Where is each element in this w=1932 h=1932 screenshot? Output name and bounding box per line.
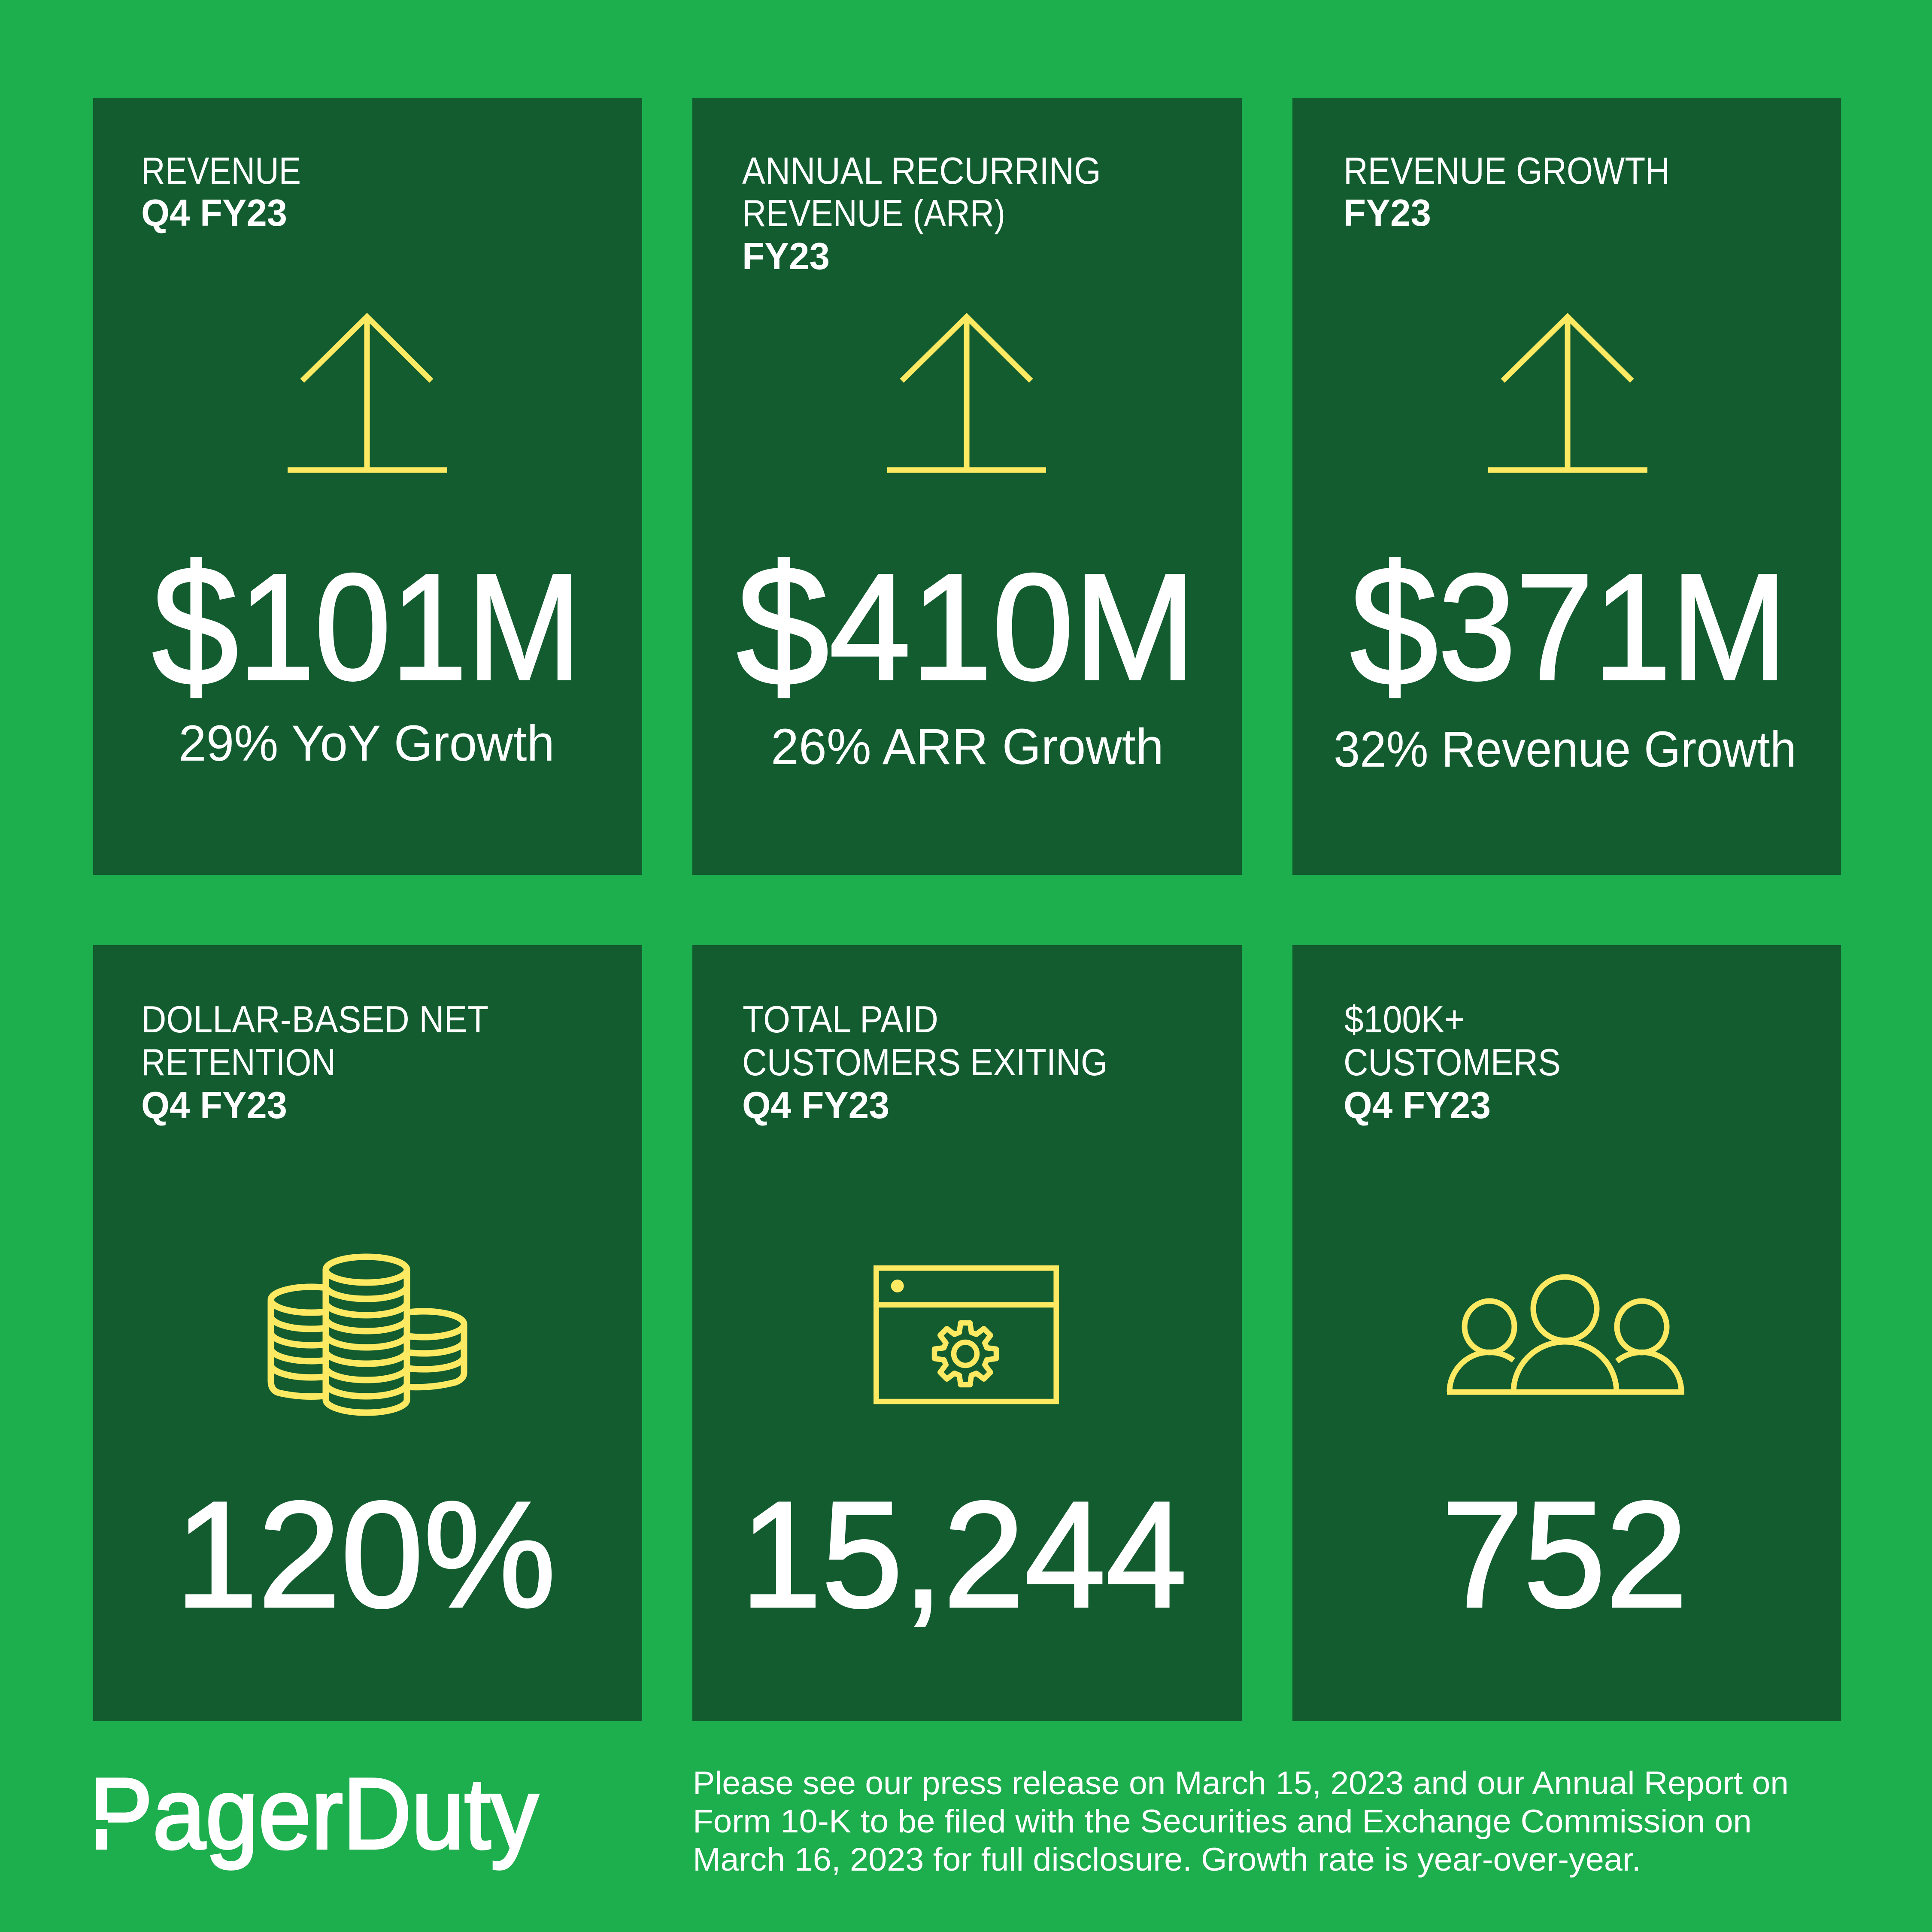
panel: total paid customers bbox=[692, 945, 1242, 1721]
footnote: Form 10-K to be filed with the Securities and Exchange Commission on bbox=[693, 1803, 1752, 1840]
panel: annual recurring revenue bbox=[692, 98, 1242, 875]
icon: coin stacks bbox=[271, 1257, 464, 1413]
panel: net retention bbox=[93, 945, 642, 1721]
heading: ARR: FY23 bbox=[742, 235, 830, 277]
icon: up arrow bbox=[887, 317, 1046, 470]
heading: revenue: REVENUE bbox=[141, 149, 301, 192]
heading: ARR bbox=[742, 149, 1101, 277]
heading: net retention: DOLLAR-BASED NET bbox=[141, 998, 488, 1040]
value: $371M: $ bbox=[1350, 530, 1438, 722]
icon: up arrow bbox=[288, 317, 447, 470]
heading: ARR: ANNUAL RECURRING bbox=[742, 149, 1101, 192]
value: $371M: 371M bbox=[1438, 542, 1787, 711]
footnote: Please see our press release on March 15, 2023 and our Annual Report on bbox=[693, 1765, 1789, 1802]
value: $101M: 101M bbox=[239, 542, 581, 711]
heading: revenue bbox=[141, 149, 301, 234]
value: 120%: 120% bbox=[175, 1470, 556, 1639]
logo: PagerDuty: PagerDuty bbox=[89, 1757, 538, 1870]
subtext: YoY growth: 29% YoY Growth bbox=[179, 715, 555, 772]
footnote bbox=[693, 1765, 1789, 1878]
value: $410M: 410M bbox=[829, 542, 1196, 711]
panel: $100K+ customers bbox=[1292, 945, 1841, 1721]
panel: revenue bbox=[93, 98, 642, 875]
heading: revenue growth: REVENUE GROWTH bbox=[1344, 149, 1670, 192]
icon: up arrow bbox=[1488, 317, 1647, 470]
heading: revenue growth bbox=[1344, 149, 1670, 234]
heading: $100K+ customers bbox=[1344, 998, 1561, 1126]
heading: net retention: RETENTION bbox=[141, 1041, 336, 1083]
footnote: March 16, 2023 for full disclosure. Growth rate is year-over-year. bbox=[693, 1841, 1641, 1878]
heading: net retention: Q4 FY23 bbox=[141, 1084, 287, 1126]
heading: $100K+ customers: $100K+ bbox=[1344, 998, 1465, 1040]
heading: revenue: Q4 FY23 bbox=[141, 191, 287, 234]
heading: total paid customers: TOTAL PAID bbox=[743, 998, 938, 1040]
subtext: revenue growth: 32% Revenue Growth bbox=[1334, 721, 1796, 778]
heading: revenue growth: FY23 bbox=[1344, 191, 1431, 234]
value: 15,244: 15,244 bbox=[740, 1470, 1187, 1639]
value: $410M: $ bbox=[737, 530, 829, 722]
icon: three people bbox=[1447, 1277, 1684, 1392]
subtext: ARR growth: 26% ARR Growth bbox=[771, 719, 1164, 775]
value: $101M: $ bbox=[152, 530, 239, 722]
heading: $100K+ customers: CUSTOMERS bbox=[1344, 1041, 1561, 1083]
icon: browser window with gear bbox=[873, 1268, 1059, 1401]
value: 752: 752 bbox=[1441, 1470, 1688, 1639]
heading: total paid customers: Q4 FY23 bbox=[742, 1084, 889, 1126]
heading: net retention bbox=[141, 998, 488, 1126]
heading: $100K+ customers: Q4 FY23 bbox=[1344, 1084, 1491, 1126]
heading: total paid customers: CUSTOMERS EXITING bbox=[742, 1041, 1107, 1083]
heading: ARR: REVENUE (ARR) bbox=[742, 192, 1005, 234]
heading: total paid customers bbox=[742, 998, 1107, 1126]
panel: revenue growth bbox=[1292, 98, 1841, 875]
